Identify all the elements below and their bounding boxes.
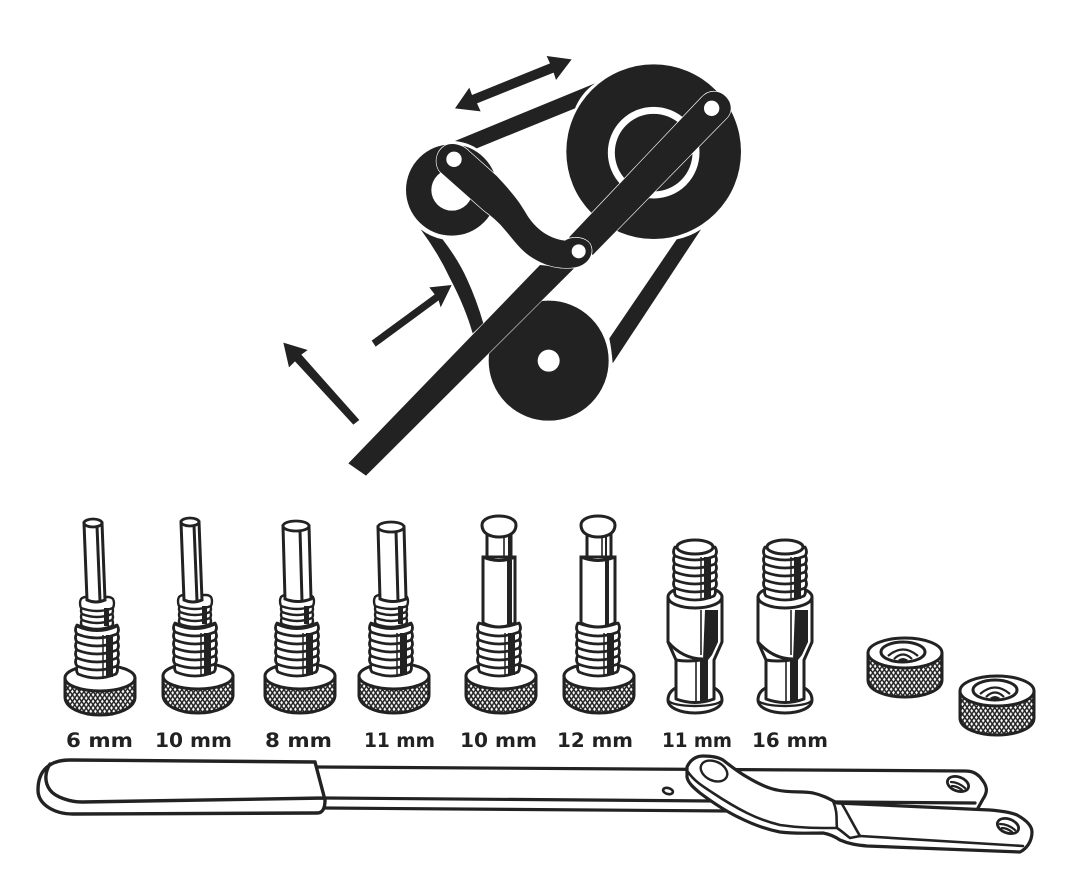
knurled nut 1 (868, 638, 942, 697)
S-shaped link (436, 144, 592, 268)
pulley belt diagram (283, 56, 741, 476)
bolt 11 mm short (359, 522, 429, 713)
arrow: towards belt (372, 285, 452, 347)
bolt 10 mm capped (466, 516, 536, 713)
label 10 mm capped: 10 mm (460, 729, 537, 752)
threaded stud 16 mm (758, 540, 812, 713)
lever arm: upper section (569, 92, 731, 255)
label 12 mm: 12 mm (557, 729, 633, 752)
label 16 mm: 16 mm (752, 729, 828, 752)
rubber handle grip (38, 760, 325, 814)
pulley: large with ring (566, 64, 741, 239)
threaded stud 11 mm (668, 540, 722, 713)
belt: left curved run (421, 229, 483, 333)
lever arm: lower section (348, 265, 574, 476)
pulley: left small with hole (406, 144, 497, 236)
bolt 8 mm (265, 521, 335, 713)
arrow: double-headed slide direction (455, 56, 572, 111)
bolt 12 mm capped (564, 516, 634, 713)
long wrench (38, 760, 986, 814)
pulley: bottom with centre hole (488, 300, 609, 421)
bolt 6 mm (65, 519, 135, 715)
wrench body (687, 756, 1032, 852)
short offset wrench (687, 756, 1032, 852)
pivot hole (697, 756, 731, 786)
wrench shaft (317, 767, 986, 811)
label 8 mm: 8 mm (265, 729, 332, 752)
label 11 mm: 11 mm (364, 729, 435, 752)
size labels (66, 729, 828, 752)
knurled nut 2 (960, 676, 1034, 735)
end hole (995, 816, 1021, 836)
wrench end hole (945, 774, 971, 794)
bolts, thumb-head type with capped stem (466, 516, 634, 713)
label 10 mm: 10 mm (155, 729, 232, 752)
bolts, thumb-head type with hex shaft (65, 518, 429, 715)
label 6 mm: 6 mm (66, 729, 133, 752)
belt: top run (455, 83, 595, 148)
small rivet (662, 787, 674, 795)
bolt 10 mm short (163, 518, 233, 713)
arrow: pull direction (283, 343, 359, 425)
wrench step (833, 801, 860, 836)
belt: right run (609, 229, 701, 363)
label 11 mm stud: 11 mm (662, 729, 732, 752)
wrench face edge (688, 772, 1023, 846)
